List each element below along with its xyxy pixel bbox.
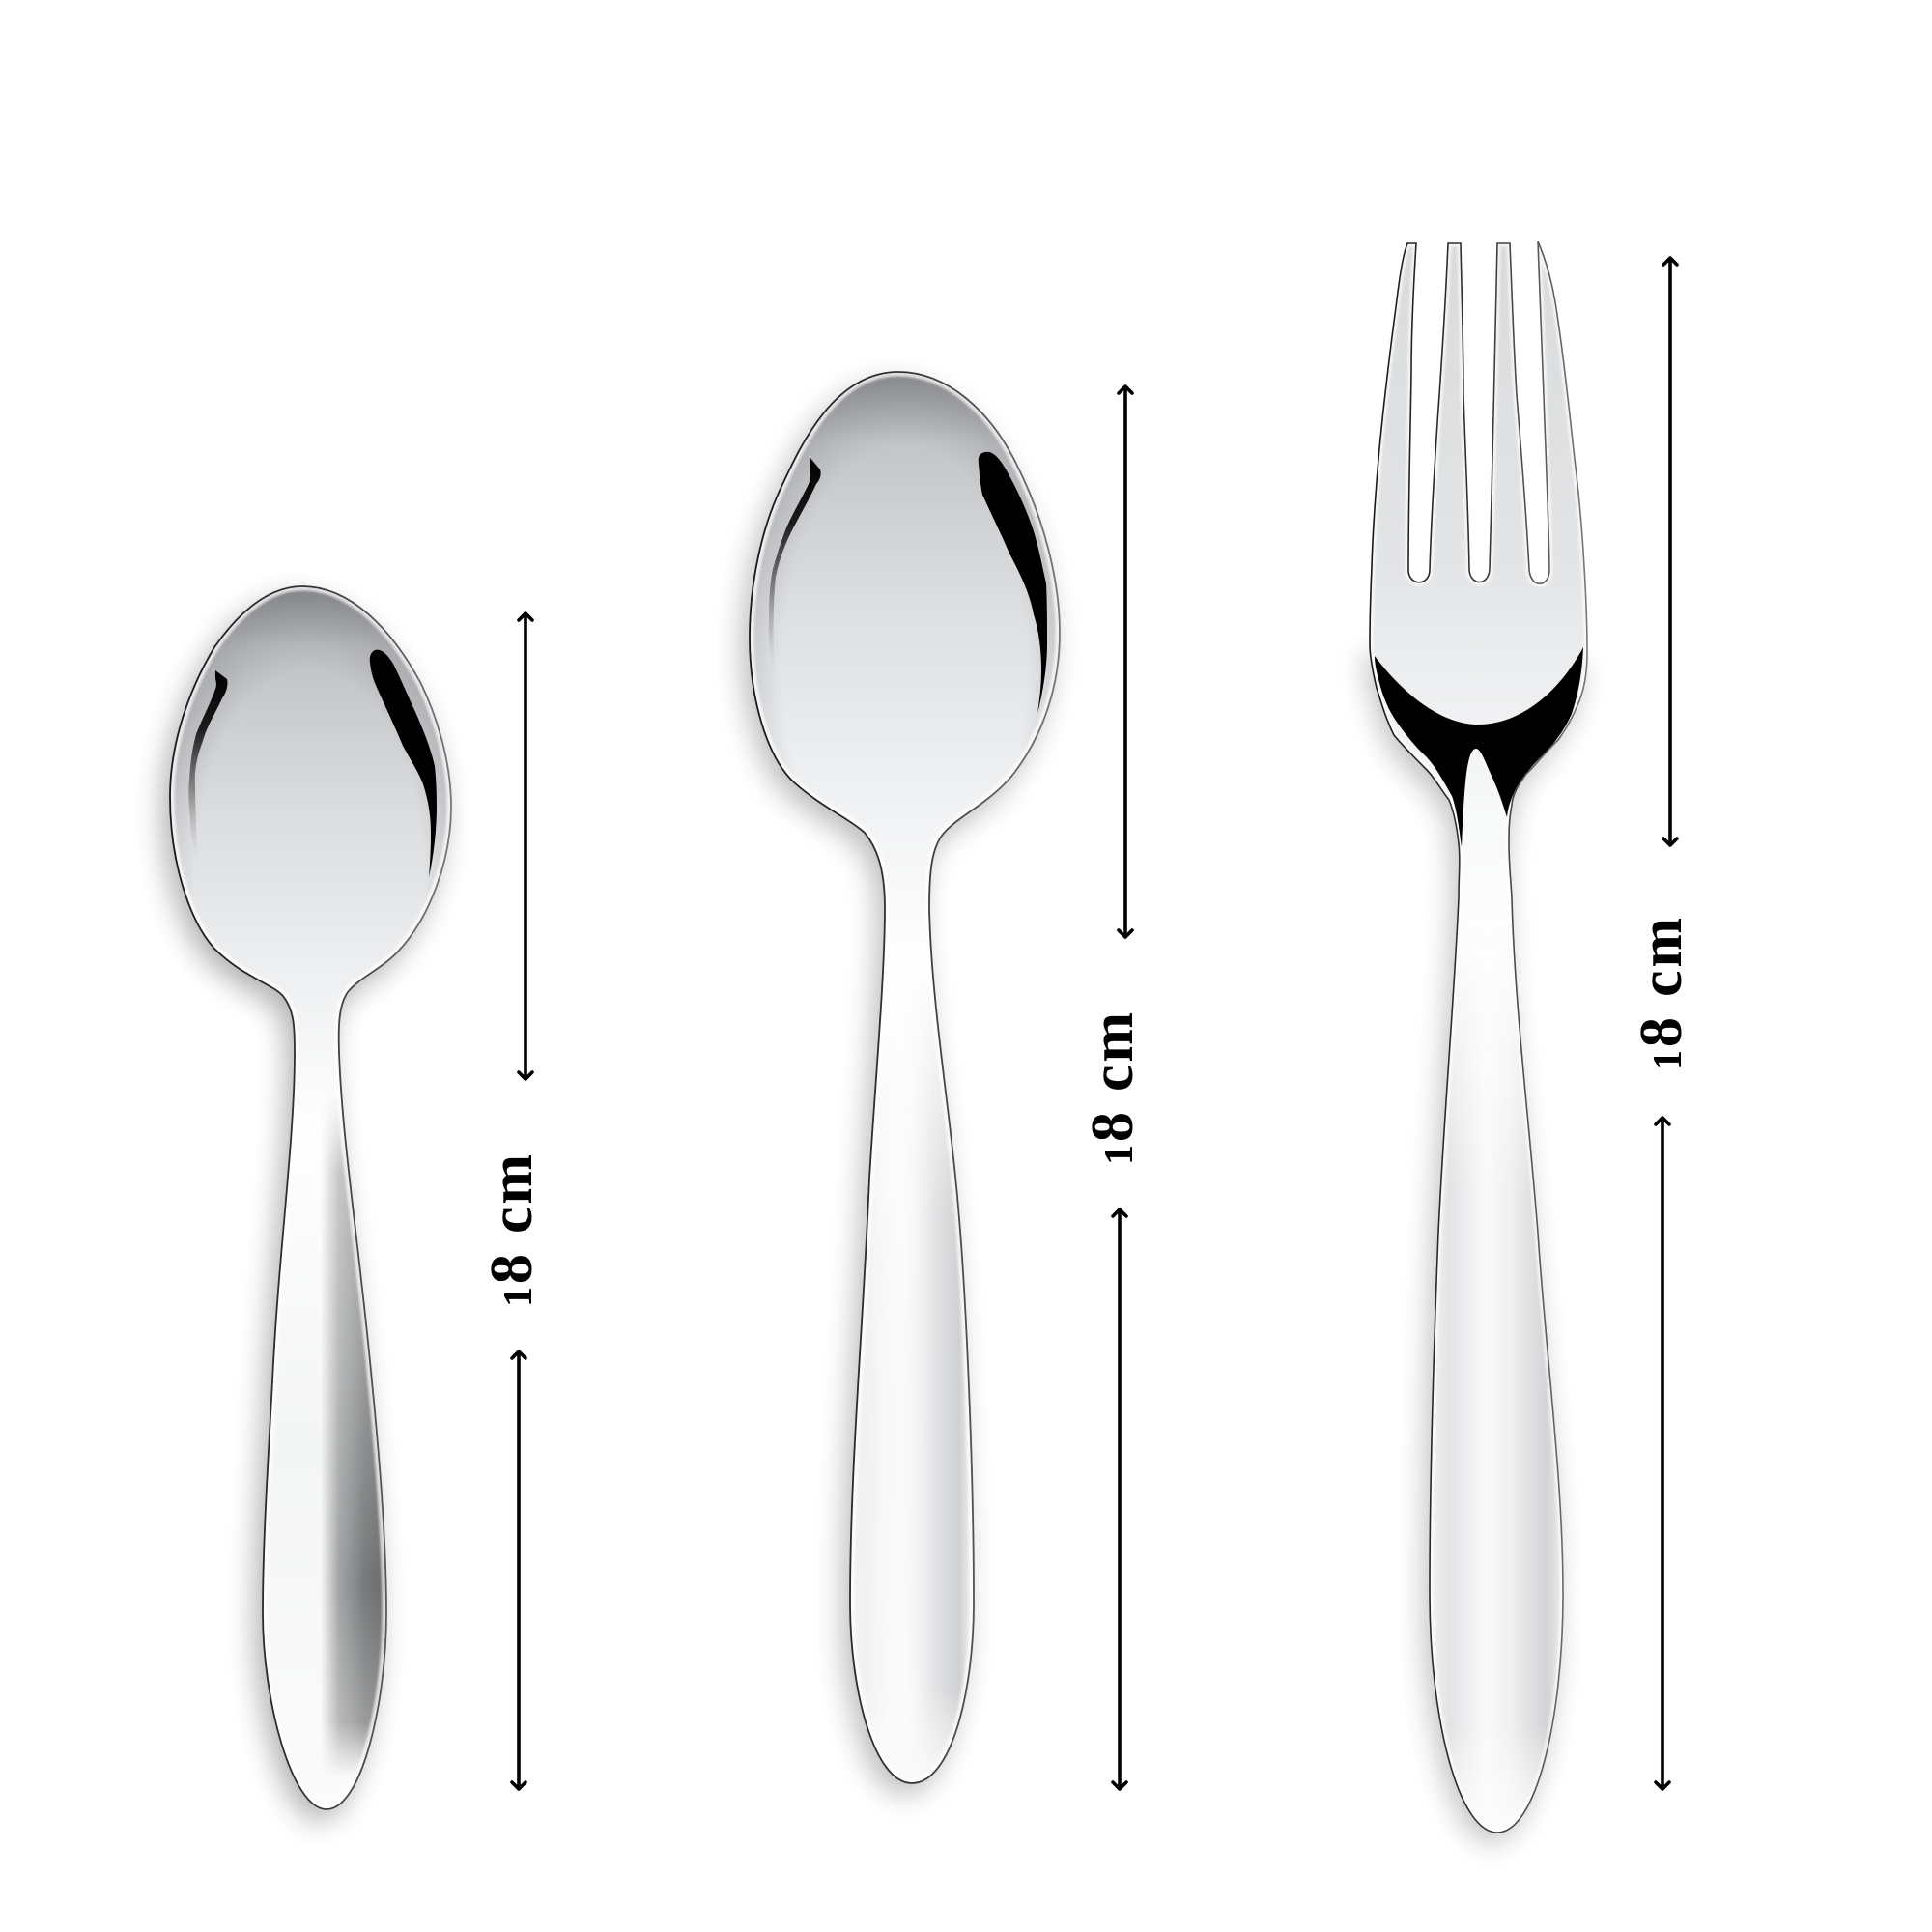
fork body (1370, 242, 1587, 1833)
medium spoon bowl rim shading (706, 314, 1102, 1019)
arrow: medium spoon upper (1119, 386, 1132, 937)
fork outline (1370, 242, 1587, 1833)
small spoon outline (170, 586, 451, 1809)
small spoon left reflection (188, 670, 227, 863)
label: medium spoon length: 18 cm (1080, 1012, 1146, 1165)
arrow: fork upper (1663, 258, 1677, 845)
arrow: small spoon lower (512, 1351, 526, 1789)
medium spoon outline (750, 372, 1060, 1783)
small spoon inner bevel (170, 586, 451, 1809)
medium spoon handle shading (840, 966, 985, 1787)
medium spoon left reflection (769, 457, 821, 676)
small spoon (146, 582, 460, 1833)
fork inner bevel (1370, 242, 1587, 1833)
medium spoon body (750, 372, 1060, 1783)
small spoon bowl rim shading (173, 590, 448, 879)
fork shadow (1364, 654, 1581, 1842)
fork (1364, 242, 1587, 1842)
label: small spoon length: 18 cm (479, 1154, 545, 1307)
arrow: small spoon upper (519, 613, 532, 1079)
medium spoon (706, 314, 1102, 1795)
small spoon body (170, 586, 451, 1809)
fork black reflection (1375, 647, 1583, 847)
arrow: fork lower (1656, 1118, 1669, 1789)
small spoon handle dark shading (321, 1092, 388, 1777)
medium spoon shadow (742, 384, 1052, 1795)
dimension: fork (1629, 258, 1694, 1789)
dimension: medium spoon (1080, 386, 1146, 1789)
arrow: medium spoon lower (1113, 1209, 1126, 1789)
dimension: small spoon (479, 613, 545, 1789)
fork handle shading (1420, 918, 1575, 1835)
label: fork length: 18 cm (1629, 918, 1694, 1070)
small spoon shadow (162, 598, 443, 1821)
medium spoon right reflection (979, 452, 1047, 714)
medium spoon inner bevel (750, 372, 1060, 1783)
small spoon right reflection (370, 650, 437, 877)
